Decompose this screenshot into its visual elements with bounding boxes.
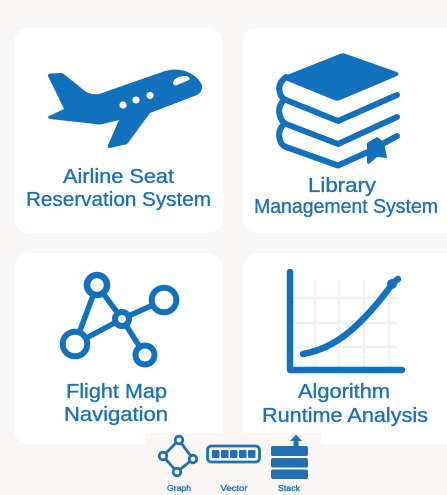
legend strip: data structures (145, 433, 321, 495)
label: graph: Graph (167, 484, 191, 493)
chart: runtime growth curve (290, 272, 402, 370)
icon: stack of books (279, 53, 398, 166)
icon: route network (63, 275, 176, 364)
label: vector: Vector (220, 484, 248, 493)
heading: flight map navigation: Flight Map (66, 381, 167, 403)
heading: airline seat reservation system (26, 166, 211, 211)
panel: flight map navigation (14, 253, 223, 444)
icon: vector (208, 446, 260, 462)
heading: library management system (254, 175, 438, 218)
heading: algorithm runtime analysis: Runtime Analysis (262, 405, 428, 427)
heading: algorithm runtime analysis: Algorithm (298, 381, 390, 403)
panel: airline seat reservation (14, 28, 223, 233)
heading: algorithm runtime analysis (262, 381, 428, 427)
panel: library management (243, 28, 447, 233)
label: stack: Stack (278, 484, 301, 493)
heading: airline seat reservation system: Reservation System (26, 189, 211, 211)
icon: stack with push arrow (271, 434, 308, 479)
heading: airline seat reservation system: Airline Seat (63, 166, 174, 188)
icon: graph (159, 436, 197, 476)
panel: algorithm runtime analysis (243, 253, 447, 444)
heading: library management system: Library (308, 175, 376, 197)
icon: airplane (48, 70, 202, 148)
heading: flight map navigation: Navigation (64, 404, 168, 426)
heading: flight map navigation (64, 381, 168, 426)
heading: library management system: Management System (254, 196, 438, 218)
